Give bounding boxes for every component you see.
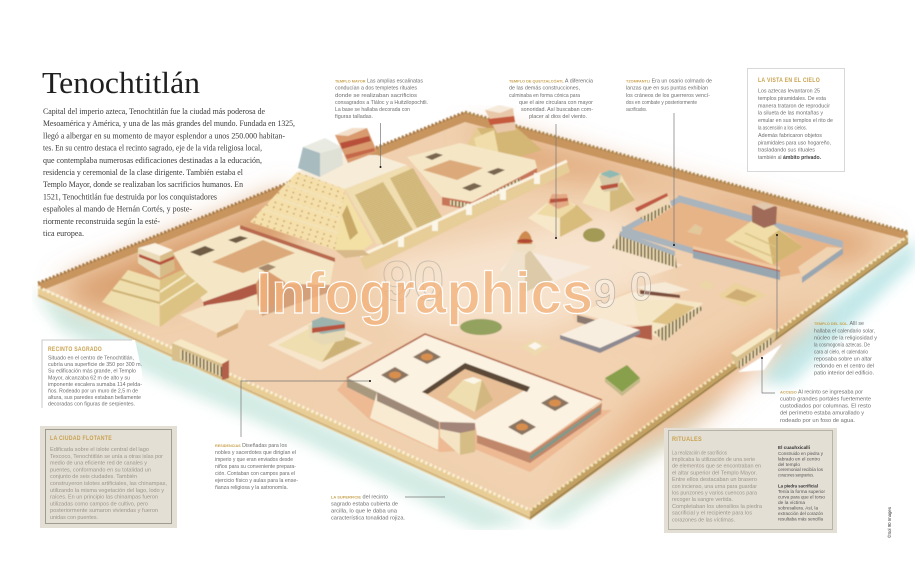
panel text: main column: con incienso, una urna para guardar xyxy=(672,484,757,490)
callout: Residencias xyxy=(215,443,298,491)
credit: ©Sol 90 Images xyxy=(887,507,892,538)
callout: Acceso: rodeado por un foso de agua. xyxy=(780,418,855,424)
panel text: construyeron islotes artificiales, las chinampas, xyxy=(50,481,167,487)
callout: Residencias: nobles y sacerdotes que dirigían el xyxy=(215,450,296,456)
callout: Templo del Sol: TEMPLO DEL SOL. Allí se xyxy=(814,321,864,327)
callout: Residencias: imperio y que eran enviados desde xyxy=(215,457,293,463)
panel text: también al ámbito privado. xyxy=(758,155,822,161)
intro paragraph: españoles al mando de Hernán Cortés, y poste- xyxy=(43,204,192,214)
intro paragraph: tes. En su centro destaca el recinto sagrado, eje de la vida religiosa local, xyxy=(43,143,262,153)
panel text: decoradas con figuras de serpientes. xyxy=(48,402,135,408)
panel text: conjunto de seis ciudades. También xyxy=(50,474,137,480)
panel text: main column: Completaban los utensilios la piedra xyxy=(672,504,762,510)
plaza floor xyxy=(38,115,908,512)
callout: Tzompantli: lanzas que en sus puntas exhibían xyxy=(626,86,708,92)
callout: Templo del Sol: patio interior del edificio. xyxy=(814,371,874,377)
panel: La vista en el cielo xyxy=(748,68,844,172)
mid temples xyxy=(528,170,635,237)
panel text xyxy=(50,447,167,521)
panel text: Mayor, alcanzaba 62 m de alto y su xyxy=(48,375,130,381)
callout: Residencias: RESIDENCIAS Diseñadas para los xyxy=(215,443,287,449)
callout: La superficie xyxy=(331,495,405,522)
callout: Templo del Sol: cara al cielo, el calendario xyxy=(814,350,868,356)
heading: Recinto sagrado: RECINTO SAGRADO xyxy=(48,347,102,353)
panel: La ciudad flotante xyxy=(40,426,177,528)
callout: La superficie: sagrado estaba cubierta de xyxy=(331,502,398,508)
panel text xyxy=(48,356,142,408)
intro paragraph: llegó a albergar en su momento de mayor esplendor a unos 250.000 habitan- xyxy=(43,130,285,140)
notch below the east gate xyxy=(738,344,782,372)
panel text: puentes, conformando en su totalidad un xyxy=(50,467,151,473)
panel text: Edificada sobre el islote central del lago xyxy=(50,447,149,453)
title: Tenochtitlán xyxy=(42,65,200,100)
callout: La superficie: LA SUPERFICIE del recinto xyxy=(331,495,388,501)
callout: Tzompantli: TZOMPANTLI Era un osario colmado de xyxy=(626,78,712,84)
panel text: side column: extracción del corazón xyxy=(778,511,823,516)
panel text: la silueta de las montañas y xyxy=(758,111,823,117)
panel text: side column: resultaba más sencilla xyxy=(778,516,823,522)
callout: Residencias: ñanza religiosa y la astronomía. xyxy=(215,485,288,491)
temple of Quetzalcoatl xyxy=(460,105,542,163)
front walls of the precinct xyxy=(38,236,908,520)
panel text: main column: sacrificial y el recipiente para los xyxy=(672,511,752,517)
callout: Tzompantli: los cráneos de los guerreros vencí- xyxy=(626,93,710,99)
panel text: Los aztecas levantaron 25 xyxy=(758,88,820,94)
callout: Templo Mayor: TEMPLO MAYOR Las amplias escalinatas xyxy=(335,78,423,84)
panel text: posteriormente sumaron viviendas y fueron xyxy=(50,508,158,514)
panel text: main column: los punzones y varios cuencos para xyxy=(672,490,757,496)
panel text: manera trataron de reproducir xyxy=(758,103,830,109)
panel text: main column: corazones de las víctimas. xyxy=(672,517,735,523)
callout: Templo Mayor: conducían a dos templetes rituales xyxy=(335,86,417,92)
panel: Rituales xyxy=(664,428,837,533)
panel text: medio de una eficiente red de canales y xyxy=(50,461,147,467)
callout: Residencias: ejercicio físico y aulas para la ense- xyxy=(215,478,298,484)
circular temple of the wind god xyxy=(495,231,592,292)
panel text: utilizando la misma vegetación del lago, lodo y xyxy=(50,488,164,494)
intro paragraph xyxy=(43,106,295,238)
panel text: side column: labrado en el centro xyxy=(778,456,820,461)
callout: Templo de Quetzalcóatl xyxy=(509,78,593,120)
callout: Residencias: niños para su conveniente prepara- xyxy=(215,464,296,470)
left pyramid xyxy=(102,243,253,338)
callout: Templo de Quetzalcóatl: que el aire circulara con mayor xyxy=(519,100,593,106)
watermark: Infographics xyxy=(256,261,593,326)
callout: Tzompantli: sacrificados. xyxy=(626,107,647,113)
residences: large palace in the foreground xyxy=(337,334,612,472)
leader dots xyxy=(369,166,778,382)
panel text: main column: Entre ellos destacaban un brasero xyxy=(672,477,757,483)
callout: Templo del Sol: la cosmogonía aztecas. De xyxy=(814,343,870,349)
panel text: utilizadas como campos de cultivo, pero xyxy=(50,501,148,507)
panel text: raíces. En un principio las chinampas fueron xyxy=(50,495,158,501)
heading: Rituales: RITUALES xyxy=(672,437,702,443)
intro paragraph: que contemplaba numerosas edificaciones destinadas a la educación, xyxy=(43,155,262,165)
callout: Templo del Sol: reposaba sobre un altar xyxy=(814,357,872,363)
panel text: side column xyxy=(778,445,825,522)
callout: Tzompantli xyxy=(626,78,712,113)
callout: La superficie: arcilla, lo que le daba una xyxy=(331,509,397,515)
intro paragraph: riormente reconstruida según la esté- xyxy=(43,216,160,226)
panel text: side column: El cuauhxicalli xyxy=(778,445,811,451)
callout: Acceso: ACCESO Al recinto se ingresaba por xyxy=(780,389,863,395)
callout: Acceso xyxy=(780,389,871,424)
panel text: ños. Rodeado por un muro de 2,5 m de xyxy=(48,388,138,394)
panel text: altura, sus paredes estaban bellamente xyxy=(48,395,141,401)
callout: Templo de Quetzalcóatl: TEMPLO DE QUETZALCÓATL A diferencia xyxy=(509,78,593,84)
panel text: side column: Tenía la forma superior xyxy=(778,489,825,494)
callout: Templo Mayor: figuras talladas. xyxy=(335,114,373,120)
courtyard complex next to Templo Mayor xyxy=(407,143,537,210)
panel text: emular en sus templos el rito de xyxy=(758,118,833,124)
callout: Templo de Quetzalcóatl: culminaba en forma cónica para xyxy=(509,93,580,99)
panel text: main column: de elementos que se encontraban en xyxy=(672,464,761,470)
heading: La ciudad flotante: LA CIUDAD FLOTANTE xyxy=(50,436,112,442)
gardens xyxy=(460,228,640,396)
heading: La vista en el cielo: LA VISTA EN EL CIELO xyxy=(758,78,820,84)
callout: Templo del Sol: redondo en el centro del xyxy=(814,364,874,370)
panel text: main column: el altar superior del Templo Mayor. xyxy=(672,470,757,476)
water around the precinct xyxy=(32,238,915,530)
watermark: 9 xyxy=(594,272,616,316)
Templo Mayor pyramid xyxy=(250,128,442,258)
panel text: side column: corazones sangrantes. xyxy=(778,473,814,478)
callout: Templo del Sol: núcleo de la religiosidad y xyxy=(814,336,877,342)
panel text: cubría una superficie de 350 por 300 m. xyxy=(48,362,142,368)
panel text: Su edificación más grande, el Templo xyxy=(48,369,136,375)
panel text: main column: implicaba la utilización de una serie xyxy=(672,457,755,463)
intro paragraph: residencia y ceremonial de la clase dirigente. También estaba el xyxy=(43,167,244,177)
callout: Templo Mayor: La base se hallaba decorada con xyxy=(335,107,410,113)
panel text: side column: ceremonial recibía los xyxy=(778,467,824,472)
intro paragraph: Templo Mayor, donde se realizaban los sacrificios humanos. En xyxy=(43,179,244,189)
panel text: la ascensión a los cielos. xyxy=(758,126,807,132)
panel text: piramidales para uso hogareño, xyxy=(758,140,831,146)
panel text: side column: La piedra sacrificial xyxy=(778,484,819,490)
intro paragraph: 1521, Tenochtitlán fue destruida por los conquistadores xyxy=(43,191,218,201)
panel text: templos piramidales. De esta xyxy=(758,96,826,102)
callout: Templo de Quetzalcóatl: placer al dios del viento. xyxy=(529,114,587,120)
panel text: side column: de la víctima xyxy=(778,500,805,505)
illustration: sacred precinct of Tenochtitlán xyxy=(32,105,915,530)
callout: Acceso: cuatro grandes portales fuertemente xyxy=(780,396,871,402)
watermark: 90 xyxy=(382,249,444,312)
callout: Templo de Quetzalcóatl: sonoridad. Así buscaban com- xyxy=(521,107,593,113)
south-west pyramid xyxy=(268,317,373,370)
callout: Acceso: del perímetro estaba amurallado y xyxy=(780,411,864,417)
panel text: trasladando sus rituales xyxy=(758,148,815,154)
callout: Tzompantli: dos en combate y posteriormente xyxy=(626,100,697,106)
intro paragraph: tica europea. xyxy=(43,228,84,238)
left courtyard complex xyxy=(173,225,335,316)
panel text xyxy=(758,88,833,161)
panel text: Además fabricaron objetos xyxy=(758,133,822,139)
panel text: main column xyxy=(672,450,762,523)
west gate xyxy=(172,339,229,380)
callout: Templo de Quetzalcóatl: de las demás construcciones, xyxy=(509,86,580,92)
panel text: main column: recoger la sangre vertida. xyxy=(672,497,733,503)
callout: Acceso: custodiados por columnas. El resto xyxy=(780,404,871,410)
callout: Templo Mayor: donde se realizaban sacrificios xyxy=(335,93,417,99)
panel text: side column: Construido en piedra y xyxy=(778,451,824,456)
temple of the left enclosure wall xyxy=(360,161,570,270)
panel text: imponente escalera sumaba 114 pelda- xyxy=(48,382,142,388)
leader lines xyxy=(241,113,777,497)
callout: Templo Mayor xyxy=(335,78,428,120)
panel text: side column: sobresaliera. Así, la xyxy=(778,506,818,510)
callout: Templo Mayor: consagrados a Tláloc y a Huitzilopochtli. xyxy=(335,100,428,106)
panel text: main column: La realización de sacrificios xyxy=(672,450,727,456)
callout: Templo del Sol xyxy=(814,321,877,377)
callout: Residencias: ción. Contaban con campos para el xyxy=(215,471,295,477)
south-east palace complex xyxy=(560,282,705,353)
panel: Recinto sagrado xyxy=(42,340,142,408)
intro paragraph: Mesoamérica y América, y una de las más grandes del mundo. Fundada en 1325, xyxy=(43,118,295,128)
watermark: 0 xyxy=(630,265,652,309)
back walls xyxy=(38,112,908,292)
panel text: unidas con puentes. xyxy=(50,515,98,521)
panel text: side column: del templo xyxy=(778,462,800,467)
callout: Templo del Sol: hallaba el calendario solar, xyxy=(814,328,875,334)
panel text: Situado en el centro de Tenochtitlán, xyxy=(48,356,134,362)
panel text: side column: curva para que el torso xyxy=(778,494,825,500)
intro paragraph: Capital del imperio azteca, Tenochtitlán fue la ciudad más poderosa de xyxy=(43,106,265,116)
plaza shading xyxy=(60,125,890,500)
callout: La superficie: característica tonalidad rojiza. xyxy=(331,516,405,522)
east gate xyxy=(731,328,776,369)
panel text: Texcoco, Tenochtitlán se unía a otras islas por xyxy=(50,454,163,460)
east enclosure with Tzompantli and pyramid xyxy=(603,193,843,283)
small plaza buildings xyxy=(520,280,767,356)
